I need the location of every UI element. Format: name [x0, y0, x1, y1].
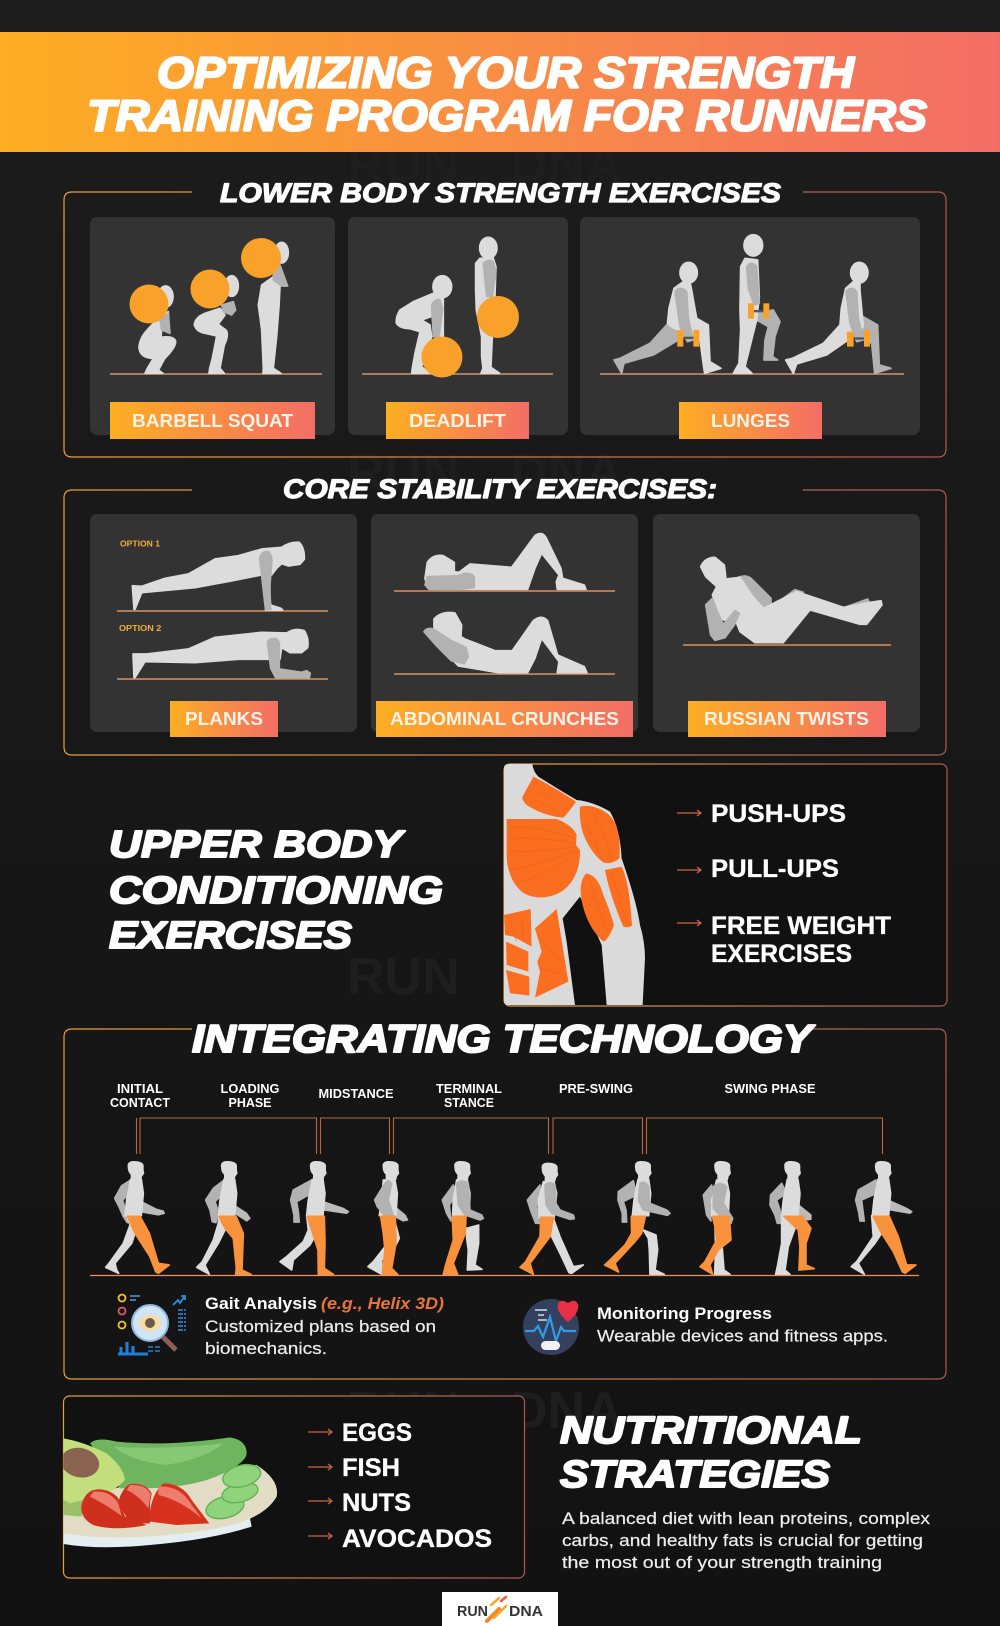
list item: free weight exercises: EXERCISES — [711, 940, 852, 968]
watermarks: DNA — [510, 948, 623, 1006]
card: russian twists — [653, 514, 920, 737]
barbell plates: deadlift — [422, 296, 519, 378]
gait phase labels: TERMINAL — [436, 1081, 502, 1096]
heading: upper body conditioning exercises: EXERCISES — [109, 915, 352, 957]
title: TRAINING PROGRAM FOR RUNNERS — [87, 92, 927, 140]
text: monitoring progress: Monitoring Progress — [597, 1304, 772, 1323]
title — [87, 48, 927, 140]
watermarks: RUN — [347, 1382, 460, 1440]
card: lunges — [580, 217, 920, 439]
gait phase labels: MIDSTANCE — [318, 1086, 394, 1101]
card: deadlift — [348, 217, 568, 439]
text: nutrition description: the most out of your strength training — [562, 1553, 882, 1572]
heading: upper body conditioning exercises — [109, 824, 443, 957]
text: monitoring progress: Wearable devices and fitness apps. — [597, 1326, 888, 1346]
heading: upper body conditioning exercises: CONDITIONING — [109, 870, 443, 912]
figures: planks: OPTION 1 — [120, 540, 161, 549]
watermarks: RUN — [347, 948, 460, 1006]
label: abdominal crunches: ABDOMINAL CRUNCHES — [390, 708, 619, 729]
text: gait analysis: (e.g., Helix 3D) — [321, 1294, 444, 1313]
label: deadlift — [386, 402, 529, 439]
watermarks: RUN — [347, 444, 460, 502]
runner 3 — [280, 1161, 349, 1274]
label: planks: PLANKS — [185, 708, 263, 729]
card: barbell squat — [90, 217, 335, 439]
panel: nutrition foods — [58, 1396, 524, 1578]
heading: nutritional strategies — [560, 1410, 862, 1496]
runner 10 — [851, 1161, 916, 1274]
text: nutrition description: carbs, and healthy fats is crucial for getting — [562, 1531, 923, 1550]
text: monitoring progress — [597, 1304, 888, 1346]
text: nutrition description: A balanced diet with lean proteins, complex — [562, 1509, 931, 1528]
icon: gait analysis — [118, 1294, 186, 1354]
runner 9 — [770, 1161, 814, 1274]
list item: fish: FISH — [342, 1454, 400, 1482]
figures: crunches — [424, 534, 587, 673]
gait phase labels — [110, 1081, 816, 1110]
watermarks: DNA — [510, 136, 623, 194]
heading: core stability: CORE STABILITY EXERCISES: — [283, 474, 717, 504]
barbell plates: squat — [130, 238, 281, 324]
label: deadlift: DEADLIFT — [409, 410, 507, 431]
gait phase labels: PHASE — [228, 1095, 272, 1110]
figure: russian twist — [701, 557, 882, 643]
watermarks: DNA — [510, 444, 623, 502]
list item: nuts: NUTS — [342, 1489, 411, 1517]
gait phase labels: CONTACT — [110, 1095, 170, 1110]
label: russian twists: RUSSIAN TWISTS — [704, 708, 869, 729]
figures: planks — [119, 540, 310, 678]
gait phase labels: LOADING — [220, 1081, 280, 1096]
figures: squat sequence — [139, 242, 288, 373]
label: barbell squat — [110, 402, 315, 439]
illustration: plate of food — [58, 1437, 277, 1547]
panel: core stability exercises — [64, 474, 946, 755]
watermarks: RUN — [347, 136, 460, 194]
label: lunges: LUNGES — [711, 410, 790, 431]
list item: nuts — [308, 1489, 411, 1517]
icon: monitoring progress — [523, 1299, 579, 1355]
panel: lower body strength exercises — [64, 178, 946, 457]
list item: eggs — [308, 1419, 412, 1447]
figures: lunges — [614, 235, 891, 373]
logo: RunDNA: DNA — [509, 1603, 543, 1620]
label: russian twists — [688, 701, 886, 737]
heading: lower body: LOWER BODY STRENGTH EXERCISES — [220, 178, 781, 208]
text: gait analysis: biomechanics. — [205, 1339, 327, 1358]
list item: free weight exercises — [677, 912, 891, 968]
list item: avocados: AVOCADOS — [342, 1525, 492, 1553]
heading: nutritional strategies: STRATEGIES — [560, 1454, 830, 1496]
figures: planks: OPTION 2 — [119, 624, 162, 633]
watermarks: DNA — [510, 1382, 623, 1440]
text: nutrition description — [562, 1509, 931, 1572]
heading: nutritional strategies: NUTRITIONAL — [560, 1410, 862, 1452]
list item: pull-ups: PULL-UPS — [711, 855, 839, 883]
runner 6 — [520, 1163, 583, 1274]
gait phase labels: STANCE — [444, 1095, 494, 1110]
title: OPTIMIZING YOUR STRENGTH — [157, 48, 855, 98]
panel: upper body list — [504, 764, 947, 1006]
illustration: upper body muscles — [504, 764, 645, 1005]
title banner — [0, 32, 1000, 152]
label: planks — [170, 701, 278, 737]
text: gait analysis: Gait Analysis — [205, 1294, 317, 1313]
watermarks — [347, 136, 623, 1440]
runner 1 — [106, 1161, 169, 1273]
figures: deadlift — [396, 237, 500, 373]
gait phase labels: INITIAL — [117, 1081, 163, 1096]
gait phase labels: SWING PHASE — [724, 1081, 816, 1096]
logo: RunDNA — [442, 1592, 558, 1626]
runner 4 — [368, 1161, 408, 1274]
gait figures: first five — [106, 1161, 483, 1274]
runner 2 — [197, 1161, 251, 1274]
gait ground line — [90, 1274, 919, 1276]
runner 7 — [605, 1161, 670, 1274]
card: planks — [90, 514, 357, 737]
panel: integrating technology — [64, 1018, 946, 1379]
label: abdominal crunches — [376, 701, 633, 737]
list item: free weight exercises: FREE WEIGHT — [711, 912, 891, 940]
runner 5 — [442, 1161, 483, 1274]
gait phase labels: PRE-SWING — [559, 1081, 633, 1096]
list item: eggs: EGGS — [342, 1419, 412, 1447]
label: barbell squat: BARBELL SQUAT — [132, 410, 294, 431]
runner 8 — [700, 1161, 733, 1274]
text: gait analysis: Customized plans based on — [205, 1317, 436, 1336]
heading: upper body conditioning exercises: UPPER BODY — [109, 824, 406, 866]
card: abdominal crunches — [371, 514, 638, 737]
heading: integrating technology: INTEGRATING TECHNOLOGY — [192, 1018, 815, 1061]
label: lunges — [679, 402, 822, 439]
text: gait analysis — [205, 1294, 444, 1358]
logo: RunDNA: RUN — [457, 1603, 488, 1620]
gait figures: last five — [520, 1161, 916, 1274]
gait phase brackets — [136, 1118, 882, 1154]
list item: fish — [308, 1454, 400, 1482]
list item: push-ups: PUSH-UPS — [711, 800, 846, 828]
